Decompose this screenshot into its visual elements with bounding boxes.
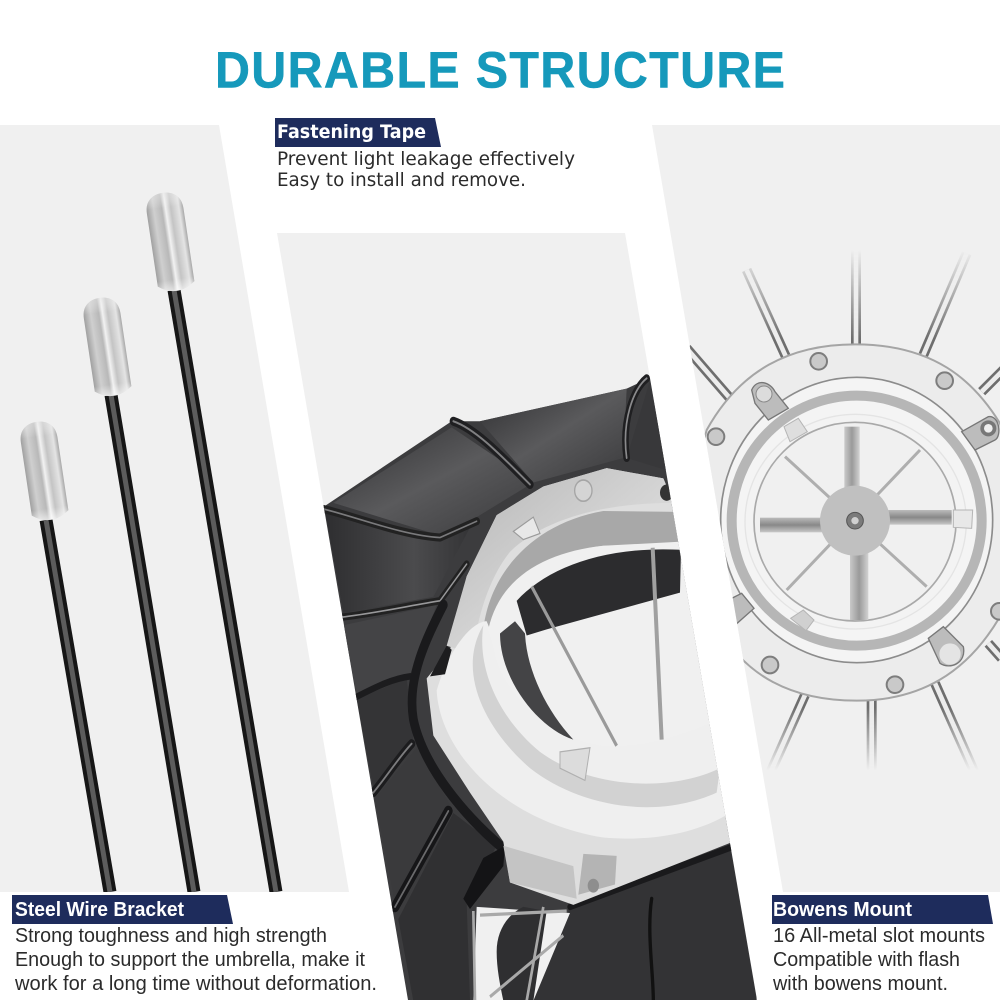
- text: steel wire bracket description: work for a long time without deformation.: [14, 973, 377, 995]
- text: steel wire bracket description: Strong toughness and high strength: [15, 925, 327, 947]
- screws: [708, 353, 1000, 693]
- softbox interior: [500, 548, 681, 780]
- center opening with spider arms: [754, 418, 973, 631]
- icon: long steel wire rod: [144, 190, 276, 892]
- text: steel wire bracket description: [14, 925, 377, 995]
- spokes below ring: [473, 907, 570, 1000]
- text: steel wire bracket description: Enough to support the umbrella, make it: [15, 949, 365, 971]
- title: DURABLE STRUCTURE: [215, 41, 785, 99]
- velcro strip: [463, 846, 505, 909]
- wire ribs: [687, 250, 1000, 773]
- text: fastening tape description: [277, 148, 575, 191]
- metal speedring: [427, 468, 733, 905]
- panel: softbox speedring photo: [277, 233, 757, 1000]
- heading tag: bowens mount: Bowens Mount: [773, 899, 912, 921]
- text: bowens mount description: 16 All-metal slot mounts: [773, 925, 985, 947]
- text: bowens mount description: with bowens mount.: [772, 973, 948, 995]
- text: fastening tape description: Easy to install and remove.: [277, 169, 526, 191]
- opening in the ring: [488, 542, 710, 746]
- heading tag: steel wire bracket: Steel Wire Bracket: [15, 899, 184, 921]
- fabric seams: [323, 378, 730, 1000]
- icon: short steel wire rod: [18, 419, 110, 892]
- text: bowens mount description: Compatible with flash: [773, 949, 960, 971]
- text: fastening tape description: Prevent light leakage effectively: [277, 148, 575, 170]
- mount flange: [699, 344, 1000, 701]
- softbox fabric: [320, 376, 757, 1000]
- panel: steel wire bracket photo: [0, 125, 349, 892]
- heading tag: fastening tape: Fastening Tape: [277, 121, 426, 143]
- text: bowens mount description: [772, 925, 985, 995]
- metal clips: [728, 383, 999, 666]
- heading tag: bowens mount: [772, 895, 993, 924]
- icon: medium steel wire rod: [81, 295, 194, 892]
- heading tag: steel wire bracket: [12, 895, 233, 924]
- panel: bowens mount photo: [652, 125, 1000, 892]
